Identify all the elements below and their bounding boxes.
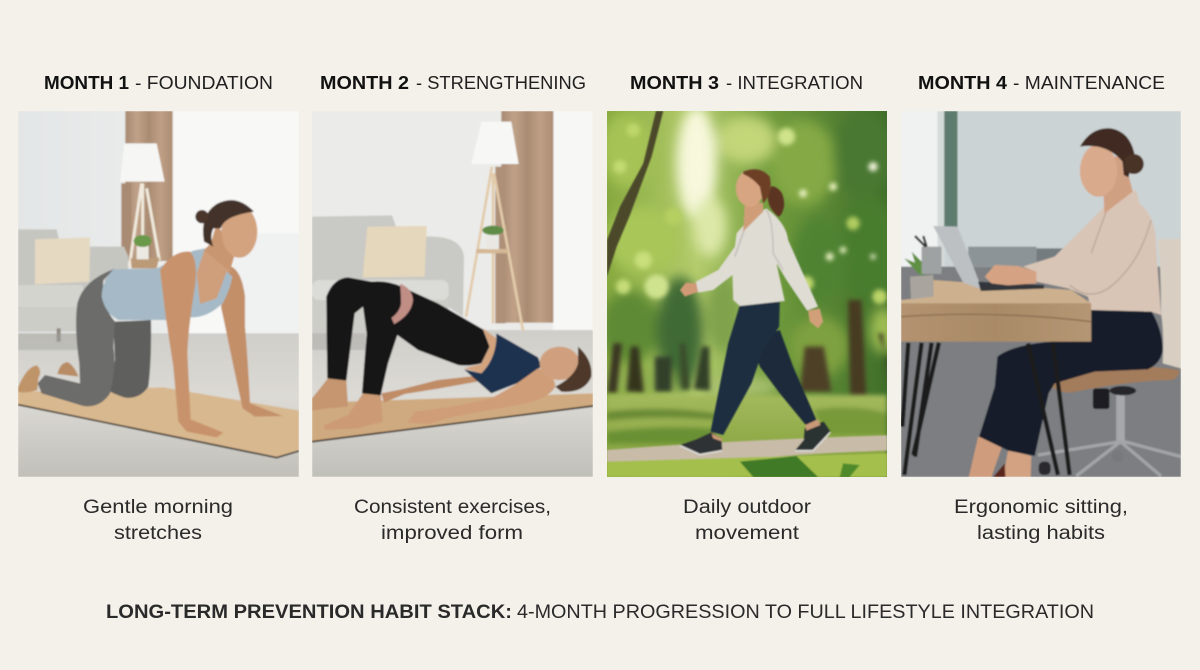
caption: month 2 <box>354 497 551 544</box>
heading: month 4 maintenance: - MAINTENANCE <box>1013 73 1165 93</box>
heading: month 1 foundation <box>44 73 273 93</box>
far leg <box>108 320 151 398</box>
near leg <box>38 269 115 406</box>
navy top <box>464 333 541 393</box>
hands <box>985 265 1036 285</box>
ponytail <box>768 186 784 217</box>
caption: month 3: movement <box>695 523 800 544</box>
midriff <box>464 328 496 373</box>
caption: month 4 <box>954 497 1128 544</box>
footer summary: 4-MONTH PROGRESSION TO FULL LIFESTYLE INTEGRATION <box>517 602 1094 623</box>
caption: month 1: stretches <box>114 523 202 544</box>
chest <box>195 248 230 307</box>
near leg <box>711 302 780 435</box>
jacket <box>696 208 818 311</box>
far leg <box>751 330 816 425</box>
leggings <box>326 277 490 395</box>
main tree trunk <box>607 111 663 277</box>
caption: month 4: lasting habits <box>977 523 1105 544</box>
hair <box>203 200 254 247</box>
heading: month 3 integration: MONTH 3 <box>630 73 719 93</box>
near foot <box>18 365 40 392</box>
panel: woman walking in a sunny park <box>607 111 887 477</box>
heading: month 2 strengthening: MONTH 2 <box>320 73 409 93</box>
trousers <box>979 310 1163 456</box>
pen cup <box>922 247 942 274</box>
hair <box>1080 128 1134 177</box>
shin and shoe <box>969 437 1003 477</box>
chair base <box>1116 393 1125 443</box>
near arm <box>160 252 223 437</box>
hair <box>743 169 771 203</box>
desk front <box>901 303 1091 342</box>
face <box>1080 145 1117 197</box>
neck <box>204 223 235 272</box>
caption: month 1 <box>83 497 233 544</box>
heading: month 1 foundation: - FOUNDATION <box>135 73 273 93</box>
neck <box>743 200 763 232</box>
shoes <box>680 432 722 454</box>
far arm <box>381 376 486 403</box>
desk legs <box>902 343 1070 475</box>
neck <box>1103 157 1133 213</box>
pot plant <box>910 275 933 299</box>
heading: month 3 integration <box>630 73 863 93</box>
ankles <box>712 433 723 442</box>
far arm <box>221 266 283 417</box>
distant trunks <box>607 343 622 393</box>
back foot <box>57 362 78 377</box>
grass <box>607 395 887 477</box>
tank top <box>102 248 232 320</box>
heading: month 2 strengthening: - STRENGTHENING <box>416 73 586 93</box>
panel: woman stretching on all fours in a living room <box>18 111 299 477</box>
caption: month 1: Gentle morning <box>83 497 233 518</box>
hair <box>555 347 592 392</box>
near hand <box>680 283 700 297</box>
feet <box>312 378 348 411</box>
path <box>607 435 887 462</box>
laptop <box>933 226 982 289</box>
resistance band <box>393 285 412 323</box>
chair back <box>1158 239 1181 368</box>
heading: month 3 integration: - INTEGRATION <box>726 73 863 93</box>
heading: month 4 maintenance: MONTH 4 <box>918 73 1007 93</box>
heading: month 4 maintenance <box>918 73 1165 93</box>
panel: woman doing glute bridge on mat <box>312 111 593 477</box>
footer summary: LONG-TERM PREVENTION HABIT STACK: <box>106 602 512 623</box>
face <box>221 206 257 258</box>
panel: woman at desk with laptop on ergonomic chair <box>901 111 1181 477</box>
heading: month 1 foundation: MONTH 1 <box>44 73 129 93</box>
caption: month 3: Daily outdoor <box>683 497 812 518</box>
caption: month 3 <box>683 497 812 544</box>
foliage <box>597 107 900 397</box>
near arm <box>407 368 555 424</box>
blouse <box>1023 190 1161 315</box>
caption: month 2: improved form <box>381 523 523 544</box>
far hand <box>808 308 823 328</box>
footer summary <box>106 602 1094 623</box>
caption: month 4: Ergonomic sitting, <box>954 497 1128 518</box>
caption: month 2: Consistent exercises, <box>354 497 551 518</box>
face <box>540 347 580 380</box>
desk top <box>901 280 1091 304</box>
face <box>736 170 764 207</box>
heading: month 2 strengthening <box>320 73 586 93</box>
seat <box>1049 367 1179 393</box>
